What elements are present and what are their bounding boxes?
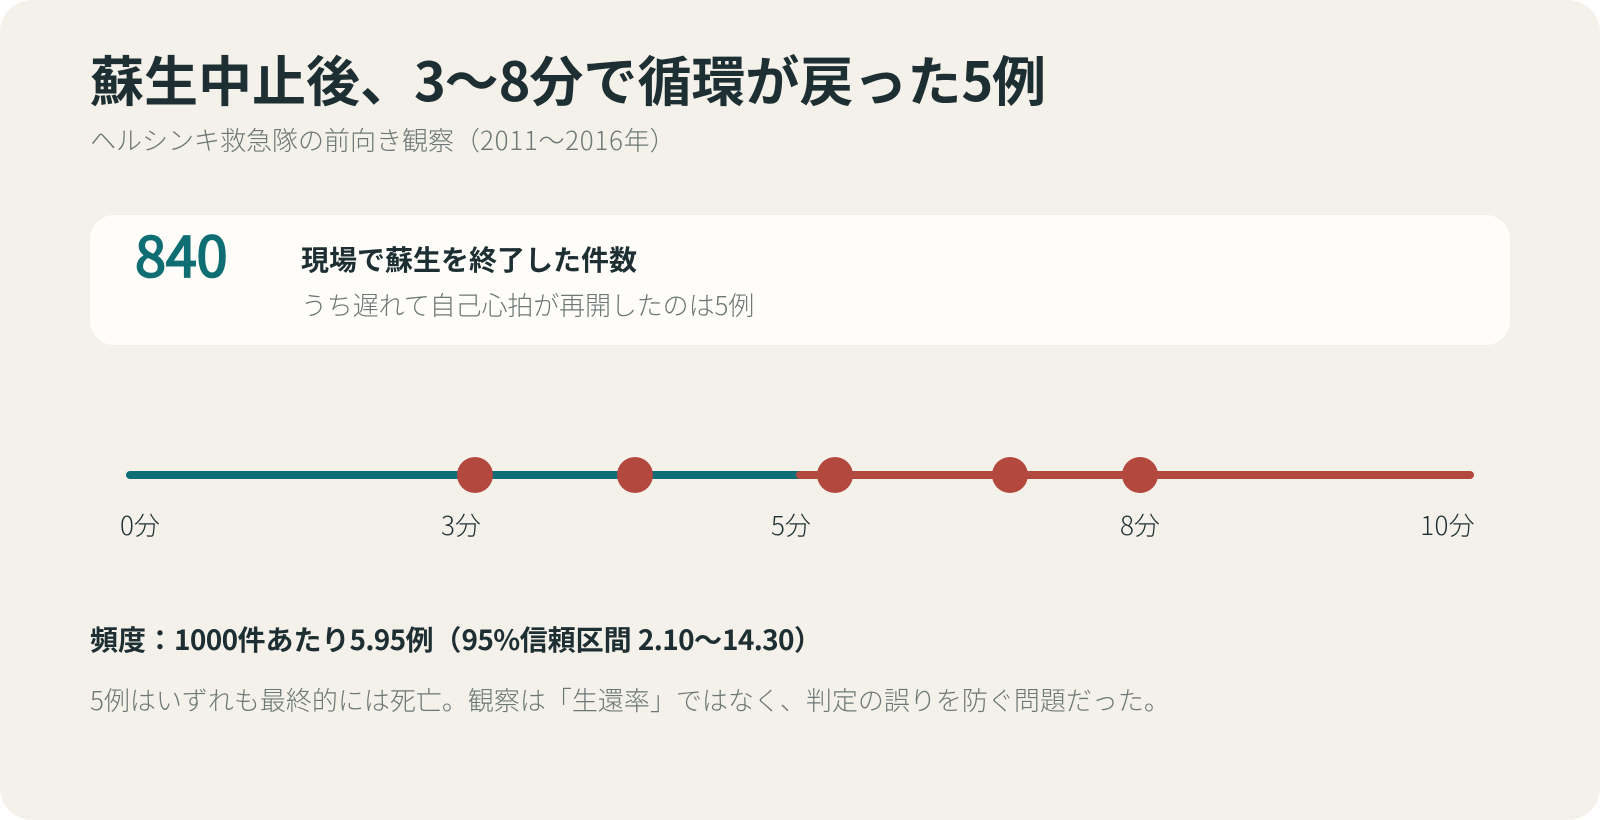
conclusion note: 5例はいずれも最終的には死亡。観察は「生還率」ではなく、判定の誤りを防ぐ問題だった。 — [90, 681, 1170, 718]
timeline chart — [126, 457, 1474, 493]
timeline axis labels — [120, 506, 1475, 543]
panel heading: 現場で蘇生を終了した件数 — [301, 239, 637, 279]
big number 840: 840 — [135, 213, 227, 294]
label 10 min: 10分 — [1420, 506, 1475, 543]
label 3 min: 3分 — [441, 506, 481, 543]
title: 蘇生中止後、3〜8分で循環が戻った5例 — [90, 38, 1046, 117]
label 5 min: 5分 — [771, 506, 811, 543]
label 0 min: 0分 — [120, 506, 160, 543]
panel note: うち遅れて自己心拍が再開したのは5例 — [301, 286, 754, 323]
subtitle: ヘルシンキ救急隊の前向き観察（2011〜2016年） — [90, 121, 676, 158]
frequency statement: 頻度：1000件あたり5.95例（95%信頼区間 2.10〜14.30） — [90, 619, 822, 659]
label 8 min: 8分 — [1120, 506, 1160, 543]
track: before 5 min — [126, 471, 806, 479]
track: after 5 min — [796, 471, 1474, 479]
panel: case count — [90, 215, 1510, 345]
event dots — [457, 457, 1158, 493]
